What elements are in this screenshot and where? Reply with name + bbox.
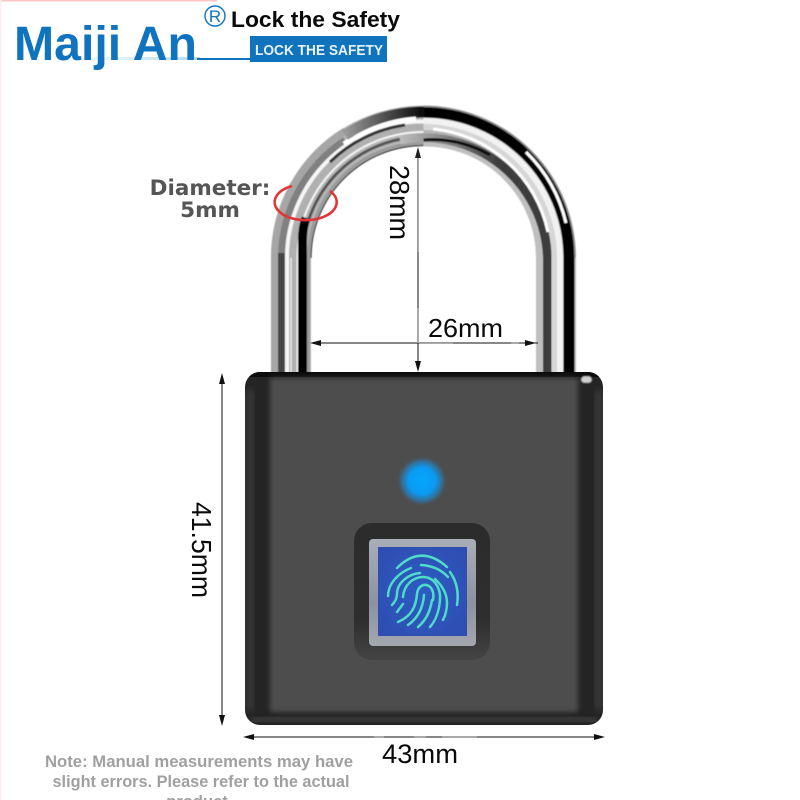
dimension: 43mm label: 43mm (382, 739, 458, 769)
logo: Maiji An: Maiji An (14, 18, 197, 71)
fingerprint sensor (354, 523, 490, 660)
page edge tint (0, 0, 217, 800)
dimension: 28mm vertical arrow (415, 147, 421, 372)
dimension: 41.5mm vertical arrow (219, 373, 225, 726)
dimension: 26mm horizontal arrow (310, 308, 538, 346)
callout: diameter label: 5mm (180, 198, 240, 223)
dimension: 41.5mm label: 41.5mm (186, 502, 217, 598)
logo: Maiji An: LOCK THE SAFETY (255, 43, 383, 59)
dimension: 28mm label: 28mm (384, 165, 415, 240)
callout: diameter label: Diameter: (150, 176, 270, 201)
callout: diameter label (150, 176, 270, 223)
callout: diameter ring (275, 186, 337, 220)
padlock body (245, 372, 603, 725)
note text: Note: Manual measurements may have (45, 753, 353, 771)
padlock shackle (274, 106, 575, 376)
indicator LED (397, 456, 447, 506)
icon: fingerprint (388, 556, 458, 627)
logo: Maiji An (14, 18, 387, 71)
slogan: registered mark and Lock the Safety: Lock the Safety (231, 7, 401, 32)
note text (45, 753, 353, 800)
slogan: registered mark and Lock the Safety: R (209, 7, 221, 26)
dimension: 43mm horizontal arrow (243, 734, 605, 740)
dimension: 26mm label: 26mm (428, 313, 503, 343)
note text: slight errors. Please refer to the actual (52, 773, 350, 791)
